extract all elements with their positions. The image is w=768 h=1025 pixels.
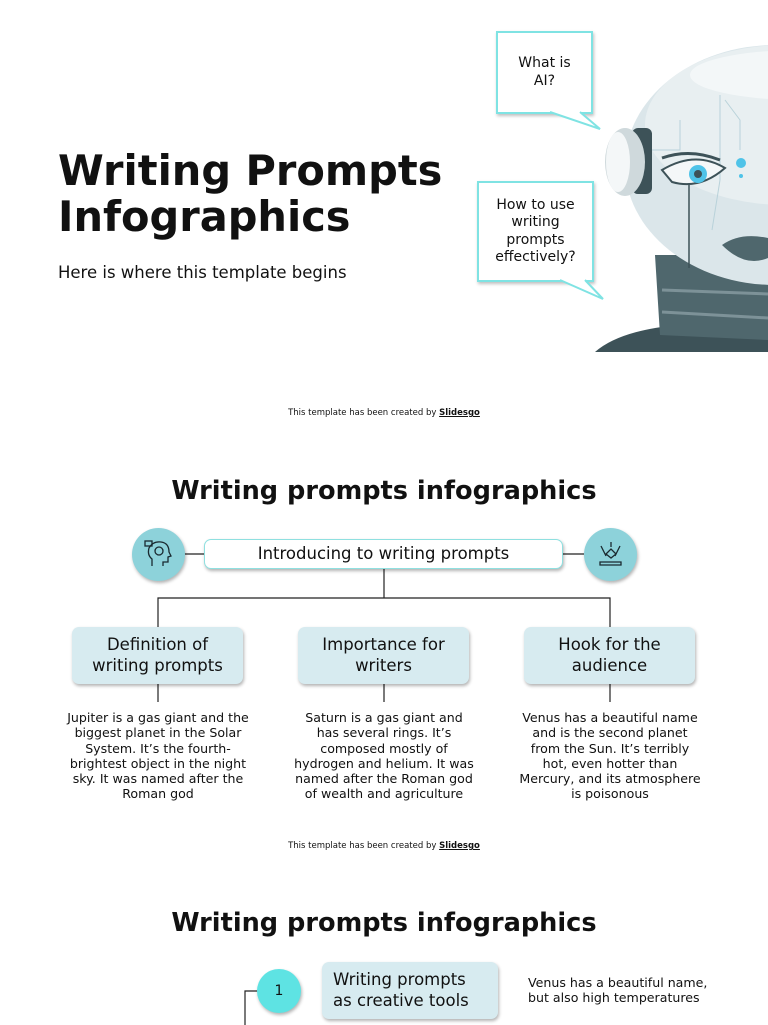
callout: What is AI (496, 31, 593, 114)
heading section 3: Writing prompts infographics (171, 908, 597, 938)
subtitle: Here is where this template begins (58, 263, 347, 282)
text: Saturn: hydrogen and helium. It was (294, 756, 474, 771)
connector lines (157, 553, 611, 702)
text: Saturn: Saturn is a gas giant and (305, 710, 463, 725)
box: Hook (524, 627, 695, 684)
icon: head with gear (132, 528, 185, 581)
text: Saturn: composed mostly of (320, 741, 448, 756)
illustration: robot head (595, 45, 768, 352)
text: Jupiter: System. It’s the fourth- (85, 741, 231, 756)
callout: How to use (477, 181, 594, 282)
box: Hook: audience (572, 656, 647, 674)
box: Importance (298, 627, 469, 684)
text: Venus short: Venus has a beautiful name, (528, 975, 707, 990)
text: Venus: and is the second planet (532, 725, 688, 740)
callout: How to use: effectively? (495, 249, 576, 265)
text: Jupiter: Roman god (122, 786, 194, 801)
box: Importance: Importance for (322, 635, 445, 654)
box: creative tools: as creative tools (333, 990, 469, 1010)
text: Jupiter: brightest object in the night (70, 756, 246, 771)
text: Venus short (528, 975, 707, 1005)
icon: box with rays (584, 528, 637, 581)
callout: How to use: How to use (496, 196, 575, 212)
callout: What is AI: AI? (534, 72, 555, 88)
box: Definition (72, 627, 243, 684)
footer credit 1: This template has been created by Slidesgo (288, 408, 480, 418)
callout: How to use: writing (511, 214, 560, 230)
text: Saturn (294, 710, 474, 801)
text: Venus: hot, even hotter than (543, 756, 677, 771)
title: Infographics (58, 192, 351, 241)
box: creative tools (322, 962, 498, 1019)
text: Venus: Mercury, and its atmosphere (519, 771, 701, 786)
text: Venus: is poisonous (571, 786, 649, 801)
text: Jupiter: Jupiter is a gas giant and the (67, 710, 249, 725)
text: Saturn: has several rings. It’s (317, 725, 451, 740)
box: Introducing: Introducing to writing prompts (258, 544, 509, 563)
callout tail 1 (550, 111, 601, 130)
text: Jupiter (66, 710, 249, 801)
text: Venus (519, 710, 701, 801)
callout: How to use: prompts (506, 232, 565, 248)
number circle 1 (257, 969, 301, 1013)
callout: What is AI: What is (518, 55, 571, 71)
box: Definition: Definition of (107, 635, 208, 654)
box: Importance: writers (355, 656, 412, 674)
text: Saturn: named after the Roman god (295, 771, 473, 786)
text: Venus: Venus has a beautiful name (522, 710, 698, 725)
footer credit 2: This template has been created by Slidesgo (288, 841, 480, 851)
number circle 1: 1 (275, 983, 283, 999)
text: Saturn: of wealth and agriculture (305, 786, 463, 801)
heading section 2: Writing prompts infographics (171, 476, 597, 506)
title: Writing Prompts (58, 146, 442, 195)
callout tail 2 (560, 279, 604, 300)
box: Definition: writing prompts (92, 656, 223, 674)
text: Venus short: but also high temperatures (528, 990, 700, 1005)
box: Introducing (204, 539, 563, 569)
text: Jupiter: sky. It was named after the (73, 771, 243, 786)
title (58, 146, 442, 241)
box: creative tools: Writing prompts (333, 970, 466, 989)
text: Venus: from the Sun. It’s terribly (531, 741, 689, 756)
connector line 3 (244, 990, 258, 1025)
box: Hook: Hook for the (558, 635, 661, 654)
text: Jupiter: biggest planet in the Solar (75, 725, 241, 740)
